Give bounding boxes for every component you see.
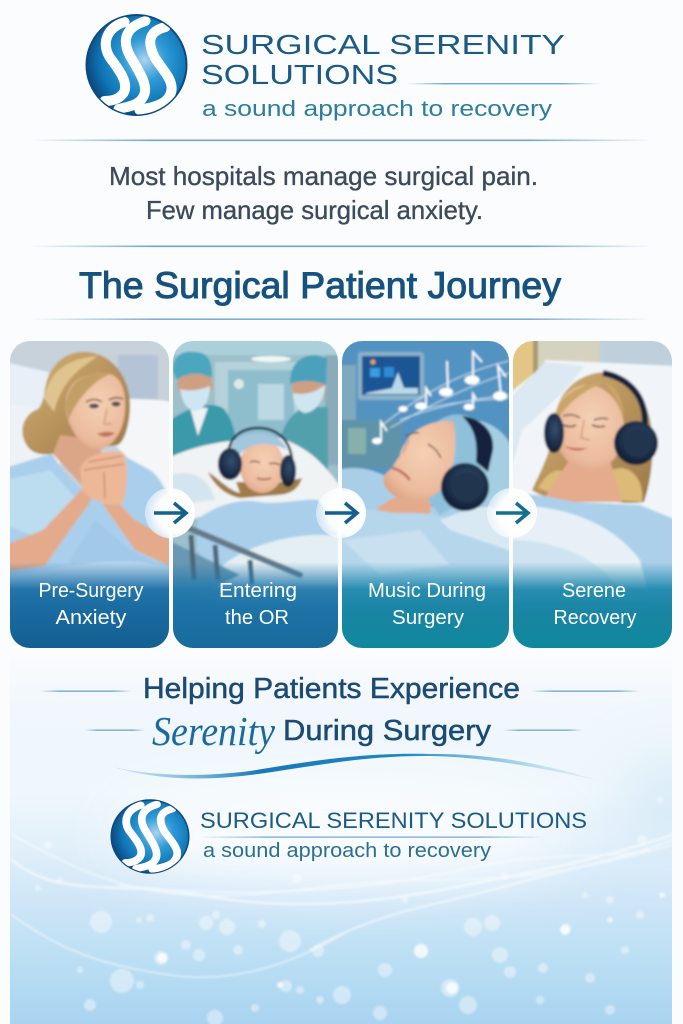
wordmark: SOLUTIONS — [201, 59, 398, 90]
wordmark — [201, 29, 565, 90]
caption band — [342, 562, 509, 648]
arrow: step 1 to step 2 — [145, 488, 195, 538]
panel: Pre-Surgery Anxiety — [5, 336, 174, 653]
arrow: step 2 to step 3 — [316, 488, 366, 538]
panel: Music During Surgery — [337, 336, 514, 653]
caption band: Anxiety — [56, 607, 126, 629]
music staff lines — [380, 361, 509, 428]
logo accent line — [407, 83, 600, 84]
headline: pain and anxiety: Few manage surgical anxiety. — [146, 195, 483, 225]
woman neck and face — [542, 460, 622, 502]
woman: face — [66, 373, 125, 449]
woman: hair — [22, 352, 130, 454]
woman: gown — [10, 453, 169, 574]
heading: The Surgical Patient Journey: The Surgical Patient Journey — [79, 265, 562, 306]
heading: Helping Patients Experience Serenity During Surgery: During Surgery — [283, 715, 492, 747]
background: pale wash with bokeh water — [10, 695, 672, 1024]
logo: Surgical Serenity Solutions — [86, 15, 600, 121]
woman: neck — [53, 435, 102, 490]
tagline: a sound approach to recovery — [202, 96, 552, 121]
patient — [376, 415, 514, 515]
caption band — [10, 562, 169, 648]
heading: Helping Patients Experience Serenity During Surgery: Serenity — [152, 708, 276, 754]
caption band: Recovery — [554, 607, 636, 629]
heading: Helping Patients Experience Serenity During Surgery: Helping Patients Experience — [143, 673, 520, 705]
heading: Helping Patients Experience Serenity During Surgery — [40, 673, 640, 781]
surgeon right — [277, 355, 328, 470]
icon: wave orb — [86, 15, 186, 115]
blanket — [337, 468, 514, 653]
caption band: Entering — [219, 580, 297, 602]
panel: Entering the OR — [168, 336, 343, 653]
caption band — [513, 562, 672, 648]
blanket — [508, 495, 677, 653]
bed rail — [186, 527, 300, 575]
caption band: Pre-Surgery — [38, 580, 144, 602]
woman hair — [532, 372, 653, 503]
surgeon left — [168, 352, 236, 458]
monitor — [358, 352, 424, 400]
icon: wave orb small — [111, 800, 189, 873]
patient pillow — [168, 438, 343, 520]
caption band: Serene — [562, 580, 626, 602]
pillow — [508, 360, 677, 520]
headline: pain and anxiety: Most hospitals manage surgical pain. — [109, 161, 538, 191]
caption band: Music During — [368, 580, 486, 602]
footer logo — [111, 800, 587, 873]
patient head with headphones — [208, 428, 302, 498]
caption band: the OR — [225, 607, 289, 629]
woman: arms and hands — [5, 488, 92, 572]
caption band — [173, 562, 338, 648]
patient gown and blanket — [197, 500, 343, 570]
woman: blanket — [10, 561, 169, 581]
footer tagline: a sound approach to recovery — [203, 840, 491, 862]
music notes — [372, 352, 507, 444]
panel: Serene Recovery — [508, 336, 677, 653]
headline: pain and anxiety — [109, 161, 538, 225]
caption band: Surgery — [392, 607, 464, 629]
footer wordmark: SURGICAL SERENITY SOLUTIONS — [200, 808, 587, 833]
arrow: step 3 to step 4 — [487, 488, 537, 538]
headphones — [544, 373, 658, 465]
wordmark: SURGICAL SERENITY — [201, 29, 565, 60]
swoosh under heading — [113, 754, 600, 781]
